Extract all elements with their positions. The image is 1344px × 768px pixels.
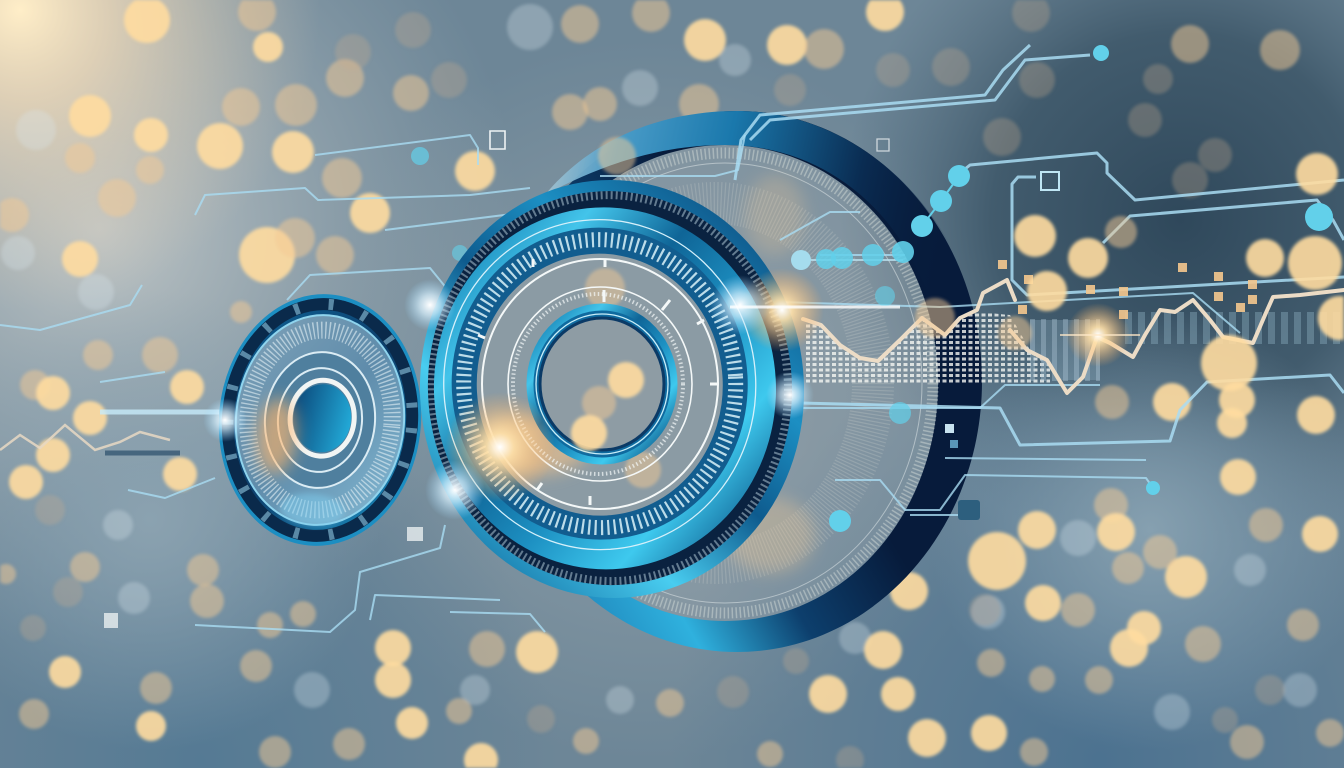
tick ring <box>444 220 756 547</box>
panel: main lens ring <box>409 170 815 608</box>
lens hole ring <box>530 307 674 461</box>
dark ticked bezel <box>418 182 802 594</box>
lens flares <box>203 268 1140 520</box>
warm glow on face <box>480 415 590 475</box>
circuit traces: right side <box>600 45 1344 515</box>
bokeh seen through face <box>585 268 661 488</box>
bar chart: dotted bars behind the data line <box>805 312 1340 385</box>
bokeh lights: foreground <box>598 137 1344 391</box>
outer metal rim <box>409 170 815 608</box>
panel: large dark back ring with translucent gauge face <box>492 111 982 652</box>
grey inner face <box>470 247 729 522</box>
inner metal band <box>425 199 785 578</box>
panel: small lens disc <box>208 286 432 554</box>
circuit traces: left side <box>0 131 545 632</box>
bokeh seen through lens <box>571 362 644 451</box>
white gauge rings <box>478 259 718 509</box>
line chart: beige data curve with markers <box>803 260 1344 393</box>
icons: cyan network nodes <box>411 45 1333 532</box>
back ring crescent <box>492 111 982 652</box>
